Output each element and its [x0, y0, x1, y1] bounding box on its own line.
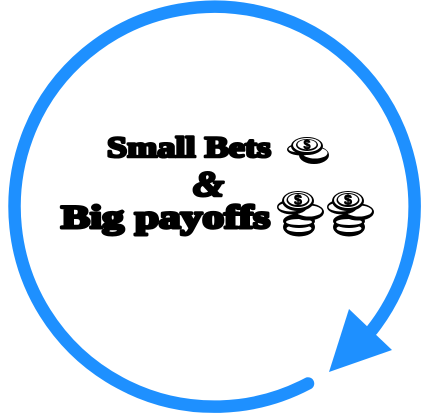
icon: large coin stack right: $	[344, 192, 352, 208]
icon: large coin stack right	[327, 191, 374, 236]
arrowhead	[329, 309, 392, 372]
icon: small coin pile: $	[304, 138, 311, 152]
title line: Big payoffs: Big payoffs	[61, 200, 270, 236]
title line: Small Bets: Small Bets	[107, 131, 271, 164]
icon: small coin pile	[287, 137, 329, 164]
icon: large coin stack left	[277, 191, 324, 236]
ampersand: &	[193, 164, 224, 204]
icon: large coin stack left: $	[294, 192, 302, 208]
